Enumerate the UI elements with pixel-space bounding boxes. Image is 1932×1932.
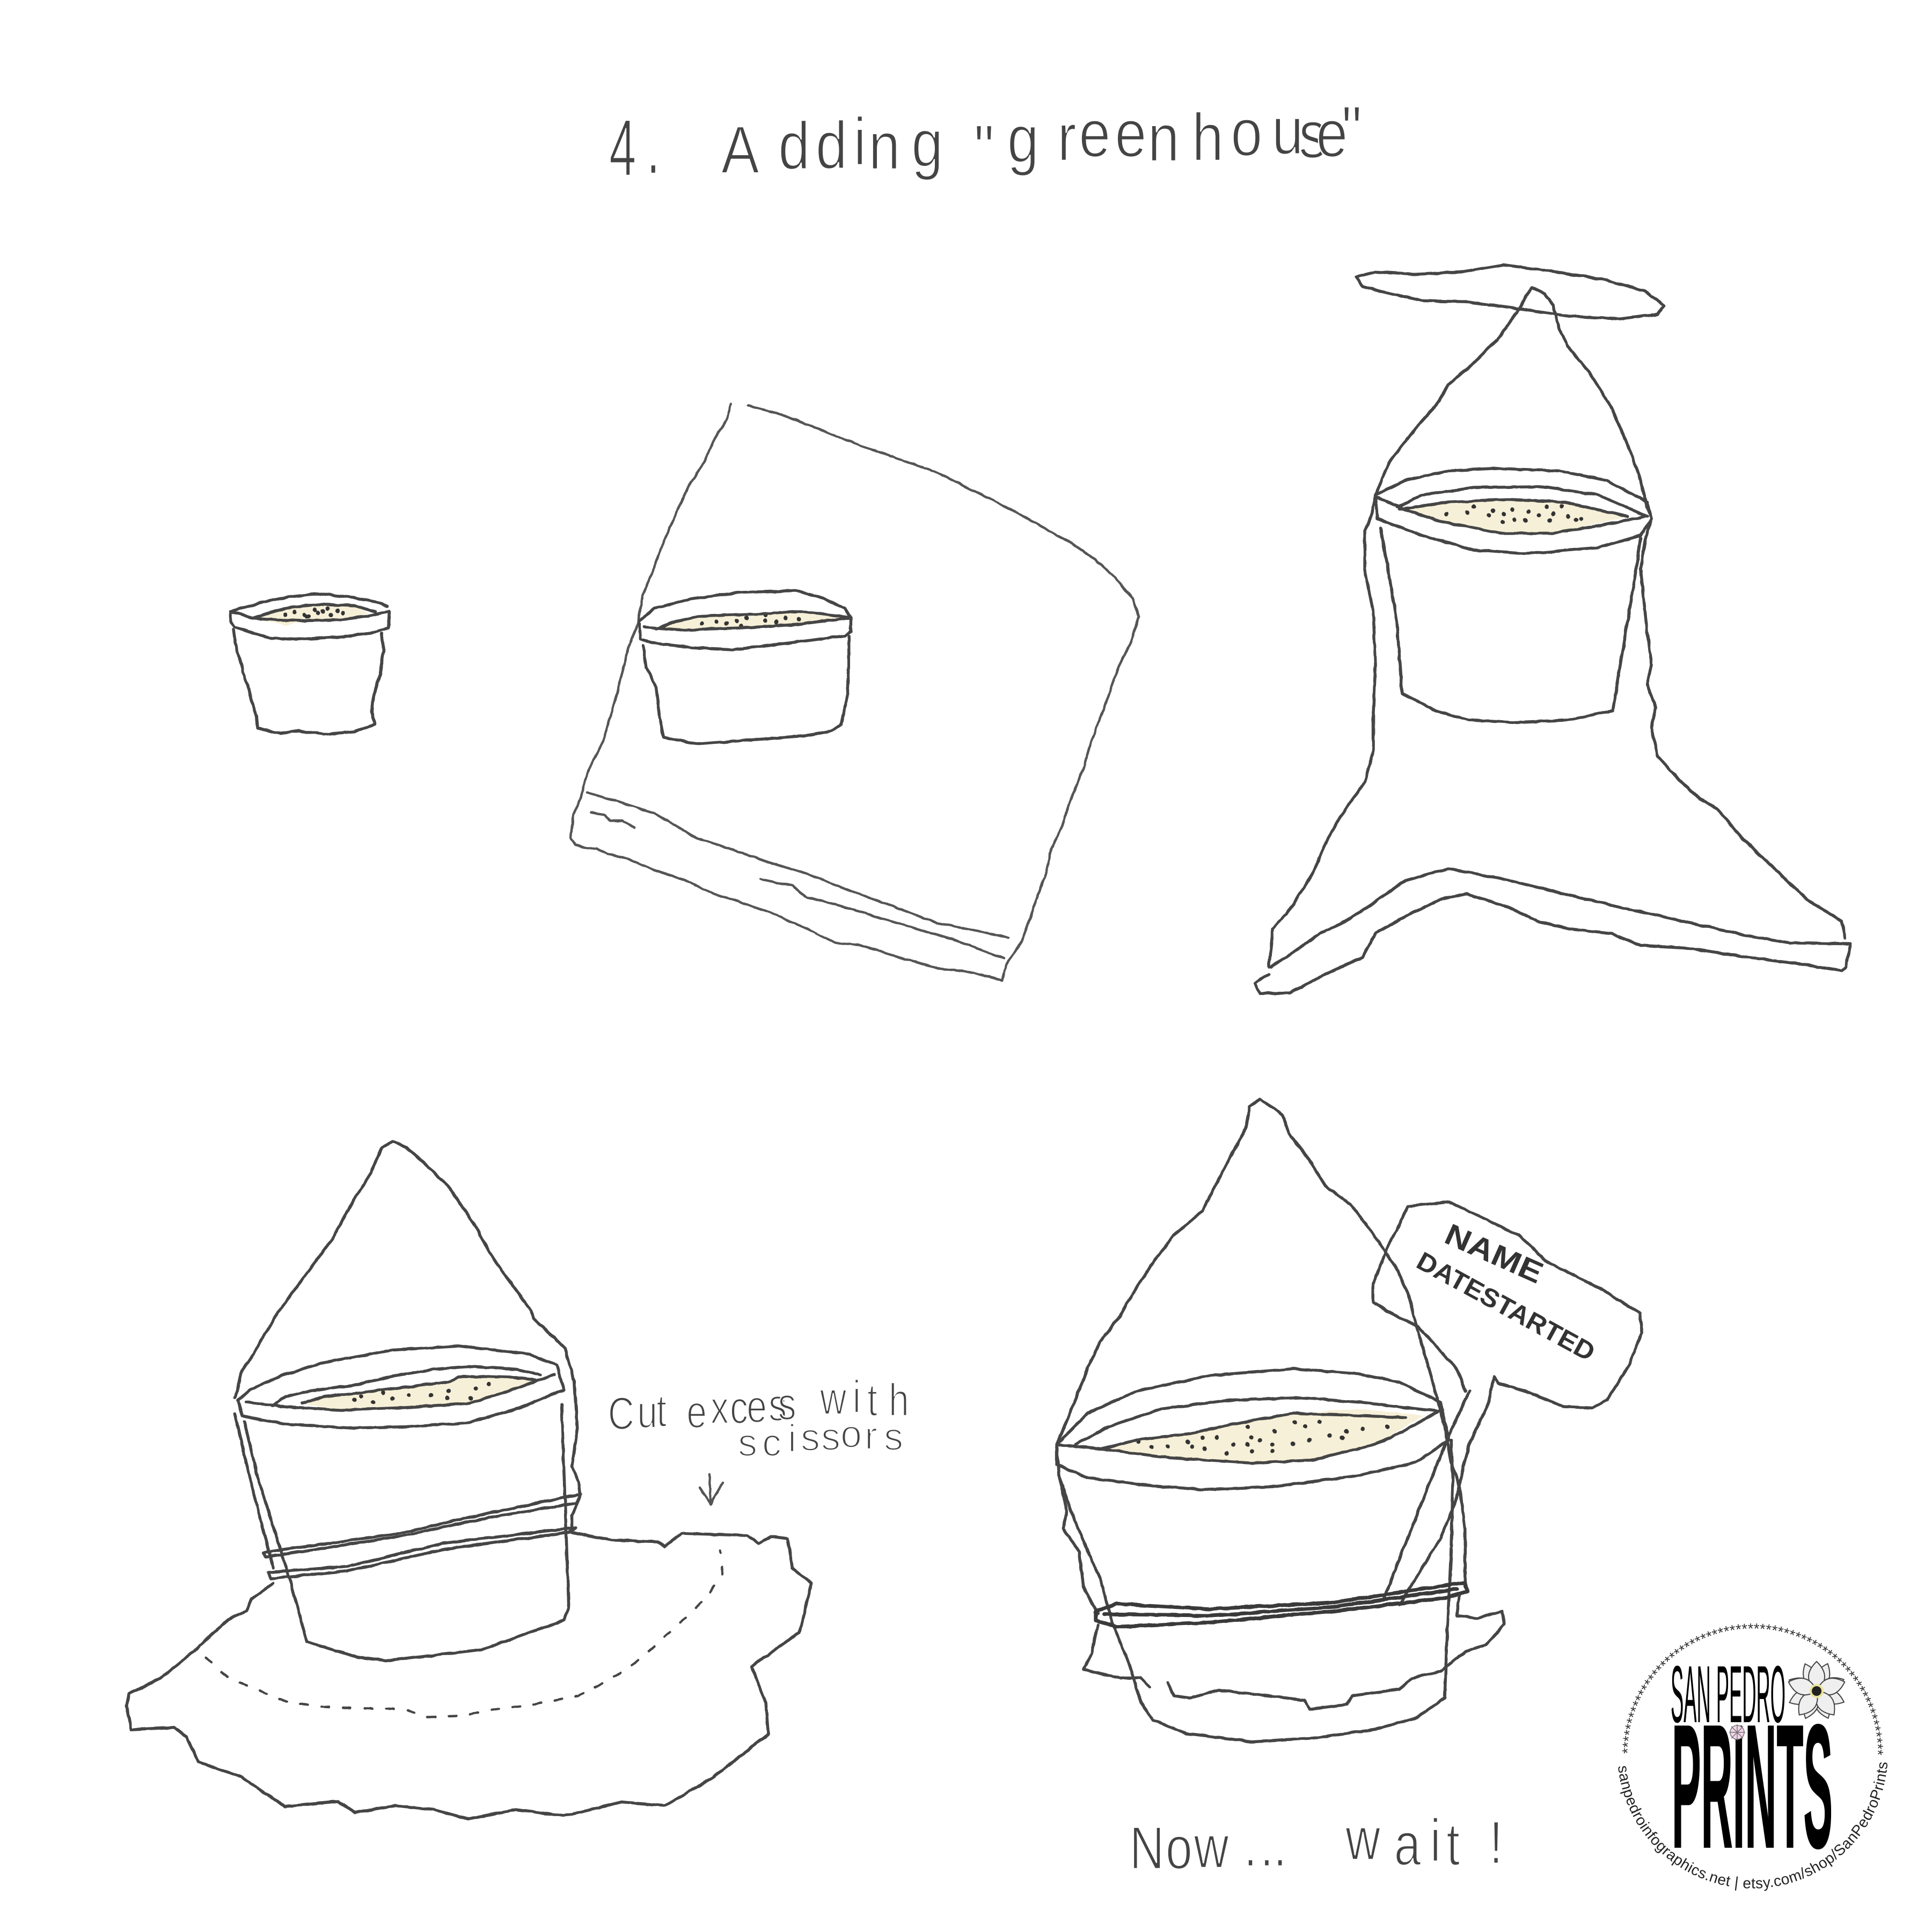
title: Adding <box>721 104 943 187</box>
step 3: bag gathered above pot <box>1255 265 1850 993</box>
pot body <box>233 630 384 734</box>
rubber bands <box>264 1494 581 1579</box>
seeds <box>1139 1422 1387 1453</box>
cut excess label: Cut excess with <box>608 1372 909 1439</box>
seeds <box>1446 506 1581 522</box>
bag outline <box>570 404 1139 980</box>
seeds <box>286 609 343 617</box>
bag skirt <box>1255 495 1850 993</box>
seeds <box>354 1384 488 1402</box>
bag skirt <box>1084 1596 1504 1709</box>
pot rim <box>1375 469 1651 554</box>
label text: NAME <box>1440 1217 1548 1290</box>
pot rim <box>238 1346 564 1428</box>
pot body <box>643 636 849 744</box>
pot rim <box>231 594 389 640</box>
bag seal lines <box>587 793 1008 958</box>
pot rim <box>1057 1369 1449 1490</box>
dashed cut line <box>206 1551 722 1717</box>
pot body <box>244 1404 569 1661</box>
soil <box>1102 1409 1424 1463</box>
step 2: pot in plastic bag <box>570 404 1139 980</box>
bag sides <box>235 1414 273 1568</box>
title: "greenhouse" <box>974 92 1362 186</box>
bag cone <box>235 1141 580 1529</box>
soil <box>302 1377 535 1410</box>
web address ring: sanpedroinfographics.net | etsy.com/shop/SanPedroPrints <box>1618 1762 1887 1891</box>
date started text: DATESTARTED <box>1412 1247 1600 1367</box>
star ring: ****************************************************************** <box>1622 1623 1883 1755</box>
cut excess label: scissors <box>738 1413 903 1465</box>
cut skirt <box>127 1532 811 1819</box>
pot rim <box>638 590 851 649</box>
pot body <box>1381 529 1641 722</box>
logo <box>1618 1623 1887 1891</box>
arrow <box>700 1474 722 1504</box>
title: 4. <box>609 101 660 193</box>
bag cone <box>1375 287 1845 938</box>
step 1: small pot <box>231 594 389 734</box>
rubber bands <box>1096 1582 1467 1627</box>
icon: small pink flower <box>1729 1724 1745 1740</box>
plant label tag <box>1373 1202 1642 1605</box>
soil <box>259 605 369 625</box>
twisted top of bag <box>1356 265 1664 319</box>
step 4: cutting excess <box>127 1141 811 1819</box>
icon: white flower <box>1786 1661 1847 1721</box>
bag cone <box>1057 1100 1465 1614</box>
now wait caption: Now... wait! <box>1130 1806 1503 1882</box>
seeds <box>702 616 799 626</box>
title <box>609 92 1362 193</box>
soil <box>1410 500 1628 533</box>
pot body <box>1059 1440 1453 1741</box>
step 5: finished greenhouse <box>1057 1100 1642 1741</box>
soil <box>656 611 847 630</box>
